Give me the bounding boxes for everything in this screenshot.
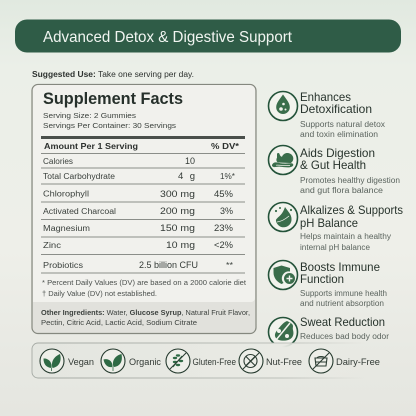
row: magnesium: Magnesium xyxy=(43,224,90,233)
badge: nut-free xyxy=(239,349,302,373)
row: total carbohydrate: Total Carbohydrate xyxy=(43,172,116,181)
row: activated charcoal: 3% xyxy=(220,206,234,217)
benefit: enhances detoxification xyxy=(268,90,385,139)
benefit: aids digestion: Aids Digestion xyxy=(300,146,375,160)
icon: no sweat xyxy=(268,318,298,346)
table header: Amount Per 1 Serving xyxy=(44,141,138,151)
badge: gluten-free xyxy=(166,349,236,373)
table header: % DV* xyxy=(211,141,240,151)
benefit: enhances detoxification: and toxin elimination xyxy=(300,130,378,139)
benefit: alkalizes xyxy=(268,202,403,252)
benefit: boosts immune: Boosts Immune xyxy=(300,260,380,274)
badge: dairy-free: Dairy-Free xyxy=(336,357,380,367)
benefit: boosts immune: and nutrient absorption xyxy=(300,299,384,308)
icon: drop and leaf xyxy=(268,202,298,232)
footnotes xyxy=(42,280,246,298)
row: zinc: <2% xyxy=(214,240,234,251)
heading: Supplement Facts xyxy=(43,90,183,108)
benefit: enhances detoxification: Supports natural detox xyxy=(300,120,385,129)
row: zinc xyxy=(43,240,234,251)
benefit: alkalizes: internal pH balance xyxy=(300,243,370,252)
badge: dairy-free xyxy=(309,349,380,373)
row: probiotics: 2.5 billion CFU xyxy=(139,260,198,271)
benefit: aids digestion: and gut flora balance xyxy=(300,186,383,195)
row: magnesium: 23% xyxy=(214,223,234,234)
other ingredients xyxy=(41,308,250,327)
benefit: alkalizes: Alkalizes & Supports xyxy=(300,203,403,217)
benefit: boosts immune: Supports immune health xyxy=(300,289,387,298)
row: zinc: 10 mg xyxy=(166,240,195,251)
icon: stomach and gut xyxy=(268,146,298,174)
benefit: enhances detoxification: Enhances xyxy=(300,90,351,104)
row: chlorophyll: 300 mg xyxy=(160,189,195,200)
footnotes: † Daily Value (DV) not established. xyxy=(42,291,157,298)
panel: supplement facts xyxy=(32,84,256,334)
benefit: sweat reduction xyxy=(268,315,389,346)
row: chlorophyll: Chlorophyll xyxy=(43,190,89,198)
row: probiotics xyxy=(43,260,233,271)
row: activated charcoal xyxy=(43,206,234,217)
badge: vegan xyxy=(40,349,94,373)
row: activated charcoal: Activated Charcoal xyxy=(43,207,116,216)
row: chlorophyll xyxy=(43,189,234,200)
row: calories xyxy=(43,156,195,167)
badge: organic: Organic xyxy=(129,357,162,367)
row: probiotics: Probiotics xyxy=(43,261,83,270)
title: Advanced Detox & Digestive Support xyxy=(43,29,293,46)
row: calories: Calories xyxy=(43,157,73,166)
panel: dietary badges xyxy=(32,343,380,378)
row: magnesium: 150 mg xyxy=(160,223,195,234)
benefit: sweat reduction: Sweat Reduction xyxy=(300,315,385,329)
icon: water drop xyxy=(268,92,298,120)
serving info xyxy=(43,111,176,130)
benefit: alkalizes: Helps maintain a healthy xyxy=(300,232,391,241)
table header xyxy=(44,141,240,151)
row: zinc: Zinc xyxy=(43,241,61,250)
benefit: aids digestion: & Gut Health xyxy=(300,158,366,172)
benefit: sweat reduction: Reduces bad body odor xyxy=(300,332,389,341)
benefit: aids digestion: Promotes healthy digestion xyxy=(300,176,400,185)
benefit: boosts immune: Function xyxy=(300,272,344,286)
benefit: alkalizes: pH Balance xyxy=(300,216,358,230)
row: calories: 10 xyxy=(185,156,195,167)
row: probiotics: ** xyxy=(226,261,233,270)
row: total carbohydrate: 1%* xyxy=(220,172,235,181)
badge: vegan: Vegan xyxy=(68,357,94,367)
other ingredients: Other Ingredients: Water, Glucose Syrup, Natural Fruit Flavor, xyxy=(41,308,250,317)
benefit: aids digestion xyxy=(268,146,400,195)
benefit: boosts immune xyxy=(268,260,387,308)
row: magnesium xyxy=(43,223,234,234)
badge: nut-free: Nut-Free xyxy=(266,357,302,367)
serving info: Serving Size: 2 Gummies xyxy=(43,111,136,120)
suggested use: Suggested Use: Take one serving per day. xyxy=(32,70,194,79)
badge: organic xyxy=(101,349,162,373)
footnotes: * Percent Daily Values (DV) are based on a 2000 calorie diet xyxy=(42,280,246,287)
row: total carbohydrate xyxy=(43,171,235,182)
row: chlorophyll: 45% xyxy=(214,189,234,200)
row: activated charcoal: 200 mg xyxy=(160,206,195,217)
icon: shield plus xyxy=(268,260,298,290)
other ingredients: Pectin, Citric Acid, Lactic Acid, Sodium Citrate xyxy=(41,318,197,327)
badge: gluten-free: Gluten-Free xyxy=(192,357,236,367)
serving info: Servings Per Container: 30 Servings xyxy=(43,121,176,130)
row: total carbohydrate: 4 g xyxy=(178,171,195,182)
title banner xyxy=(15,20,401,52)
benefit: enhances detoxification: Detoxification xyxy=(300,102,372,116)
